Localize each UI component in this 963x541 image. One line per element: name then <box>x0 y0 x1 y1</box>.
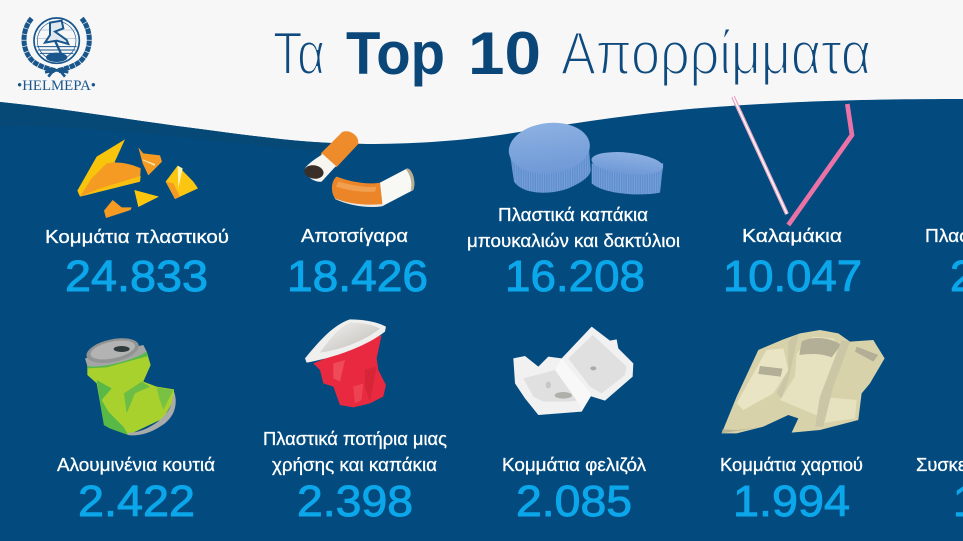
number: 2.422 <box>78 477 195 526</box>
item: plastic cups <box>263 319 447 526</box>
title: Top <box>346 20 445 87</box>
label: Κομμάτια πλαστικού <box>45 227 229 247</box>
label line 2: μπουκαλιών και δακτύλιοι <box>467 231 680 251</box>
number: 24.833 <box>65 252 208 301</box>
label: Καλαμάκια <box>742 226 842 246</box>
icon: crushed can <box>84 334 176 435</box>
icon: HELMEPA logo: •HELMEPA• <box>17 78 96 94</box>
number: 2.398 <box>297 477 413 526</box>
icon: plastic pieces <box>77 139 198 218</box>
item: aluminium cans <box>57 334 215 526</box>
item: plastic pieces <box>45 139 229 301</box>
icon: cigarette butts <box>303 133 414 207</box>
icon: crumpled newspaper <box>722 330 885 433</box>
number: 18.426 <box>287 252 428 301</box>
number: 2.085 <box>516 477 632 526</box>
icon: bottle caps <box>506 119 664 194</box>
number: 16.208 <box>505 252 645 301</box>
title <box>273 20 871 87</box>
title: 10 <box>468 20 541 87</box>
number: 1.994 <box>733 477 850 526</box>
item: cigarette butts <box>287 133 428 301</box>
label: Κομμάτια χαρτιού <box>720 455 863 475</box>
icon: HELMEPA logo <box>17 18 96 94</box>
icon: crushed cup <box>305 319 386 407</box>
item: bottle caps <box>467 119 680 301</box>
label: Πλαστικά ποτήρια μιας <box>263 429 447 449</box>
label line 2: χρήσης και καπάκια <box>272 455 437 475</box>
wave shadow band <box>0 102 367 151</box>
title: Τα <box>273 20 325 87</box>
item: cut-off top right <box>925 226 963 301</box>
icon: straws <box>733 97 852 225</box>
label: Κομμάτια φελιζόλ <box>502 455 646 475</box>
item: cut-off bottom right <box>916 455 963 526</box>
number: 10.047 <box>723 252 862 301</box>
label: Πλαστικά καπάκια <box>498 205 648 225</box>
label: Αποτσίγαρα <box>301 226 408 246</box>
item: foam pieces <box>502 327 646 526</box>
item: paper pieces <box>720 330 885 526</box>
title: Απορρίμματα <box>561 20 871 87</box>
icon: foam box <box>513 327 633 415</box>
label: Αλουμινένια κουτιά <box>57 455 215 475</box>
item: straws <box>723 97 862 301</box>
